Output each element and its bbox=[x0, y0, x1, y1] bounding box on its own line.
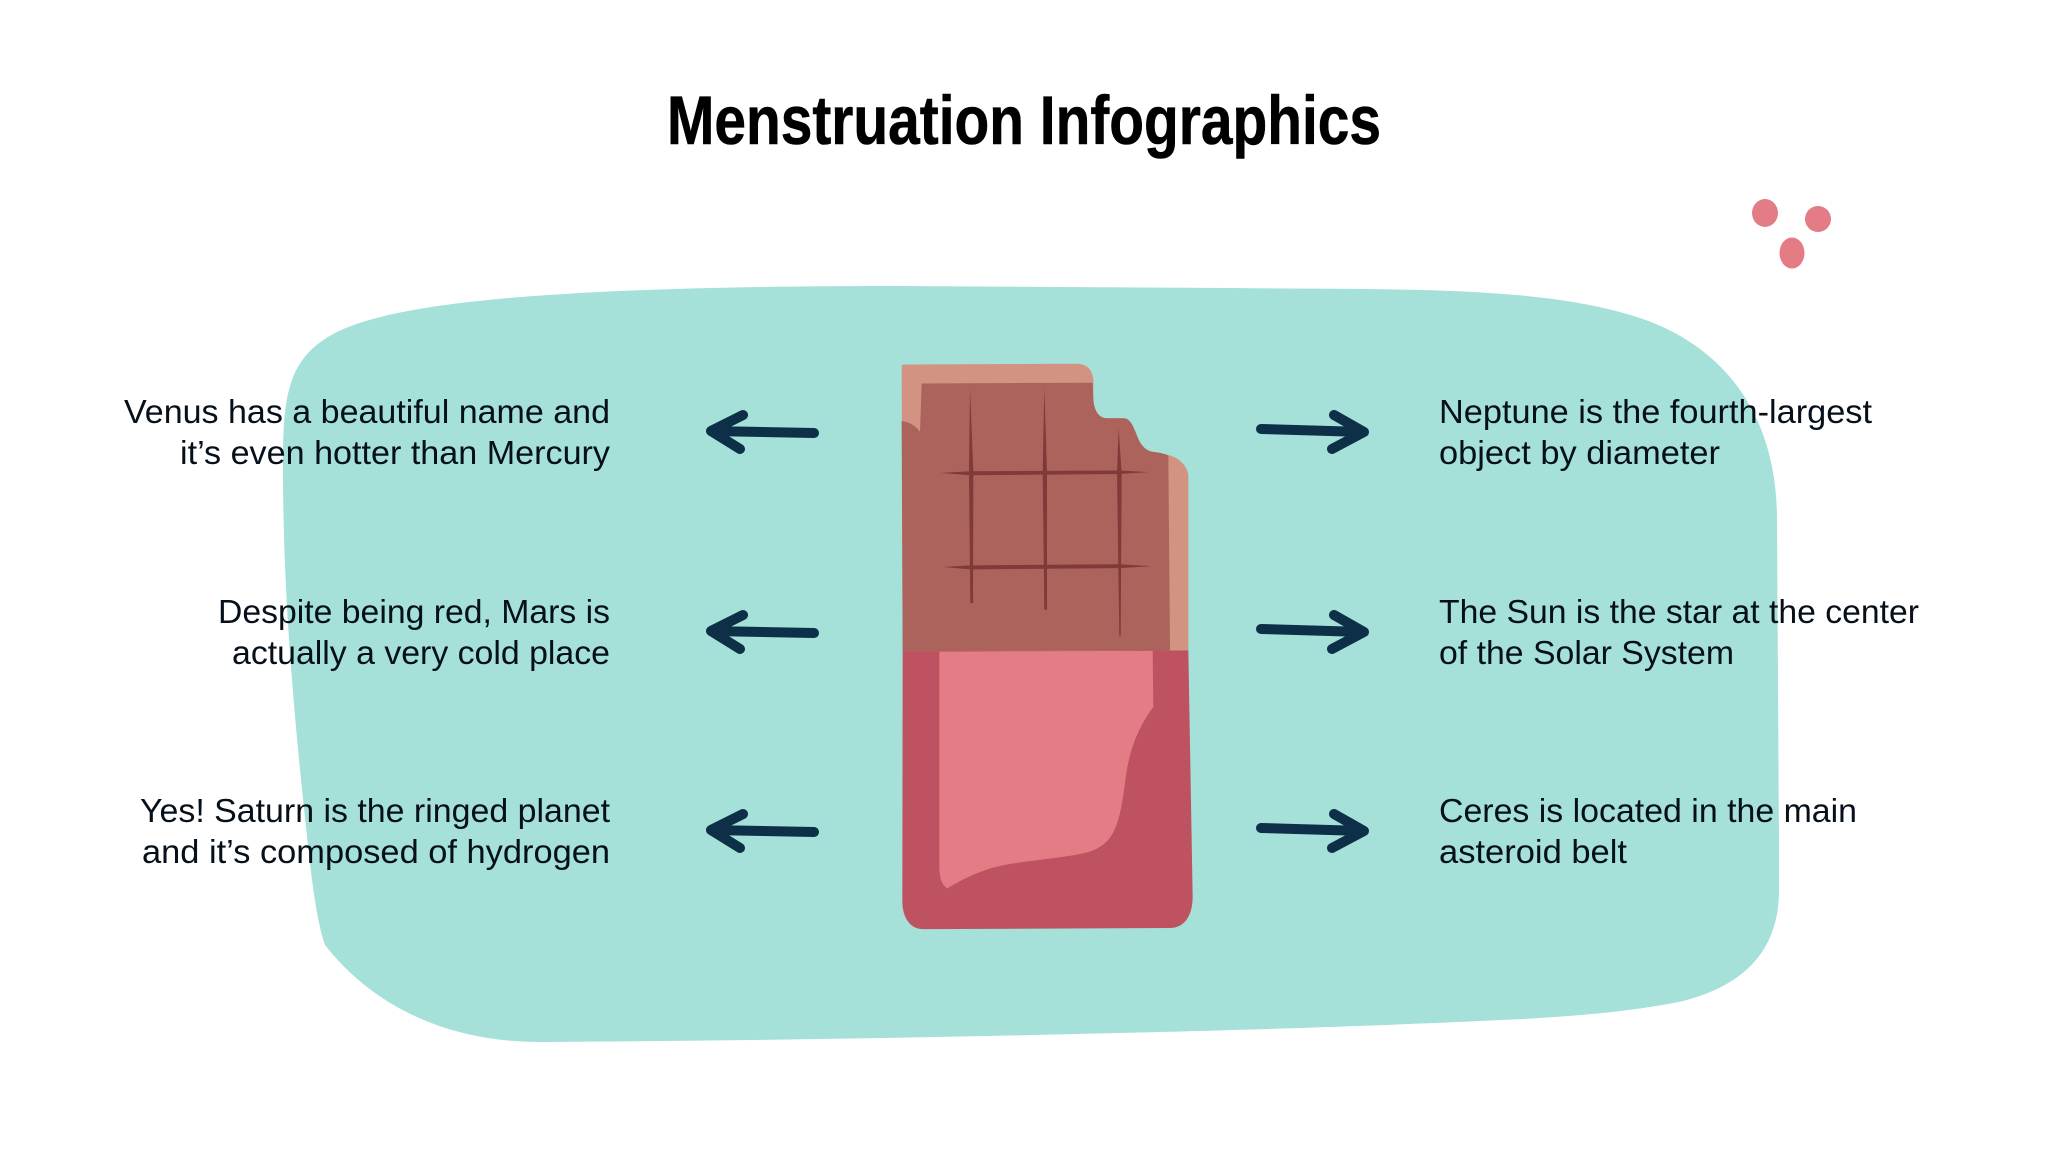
left text 3: Yes! Saturn is the ringed planet bbox=[140, 792, 610, 829]
left text 2 bbox=[218, 593, 610, 671]
left text 3: and it’s composed of hydrogen bbox=[142, 833, 610, 870]
right text 1 bbox=[1439, 393, 1872, 471]
right text 3 bbox=[1439, 792, 1857, 870]
arrow: left 1 bbox=[711, 415, 814, 449]
background blob bbox=[283, 286, 1779, 1042]
right text 3: asteroid belt bbox=[1439, 833, 1627, 870]
wrapper highlight bbox=[939, 651, 1153, 888]
right text 3: Ceres is located in the main bbox=[1439, 792, 1857, 829]
right text 2: of the Solar System bbox=[1439, 634, 1734, 671]
left text 1: it’s even hotter than Mercury bbox=[180, 434, 611, 471]
arrow: right 3 bbox=[1261, 814, 1364, 848]
arrow: left 3 bbox=[711, 814, 814, 848]
left text 2: Despite being red, Mars is bbox=[218, 593, 610, 630]
left text 2: actually a very cold place bbox=[232, 634, 610, 671]
decorative pink dots bbox=[1752, 199, 1831, 268]
right text 2 bbox=[1439, 593, 1919, 671]
right text 1: object by diameter bbox=[1439, 434, 1720, 471]
left text 1: Venus has a beautiful name and bbox=[124, 393, 610, 430]
arrow: right 2 bbox=[1261, 615, 1364, 649]
chocolate face bbox=[902, 383, 1170, 651]
arrow: left 2 bbox=[711, 615, 814, 649]
arrow: right 1 bbox=[1261, 415, 1364, 449]
chocolate score lines bbox=[941, 387, 1152, 637]
left text 1 bbox=[124, 393, 611, 471]
left text 3 bbox=[140, 792, 610, 870]
right text 1: Neptune is the fourth-largest bbox=[1439, 393, 1872, 430]
wrapper bbox=[902, 650, 1193, 929]
title: Menstruation Infographics bbox=[667, 82, 1381, 159]
illustration: bitten chocolate bar bbox=[902, 364, 1193, 929]
right text 2: The Sun is the star at the center bbox=[1439, 593, 1919, 630]
chocolate edge bbox=[902, 364, 1188, 651]
